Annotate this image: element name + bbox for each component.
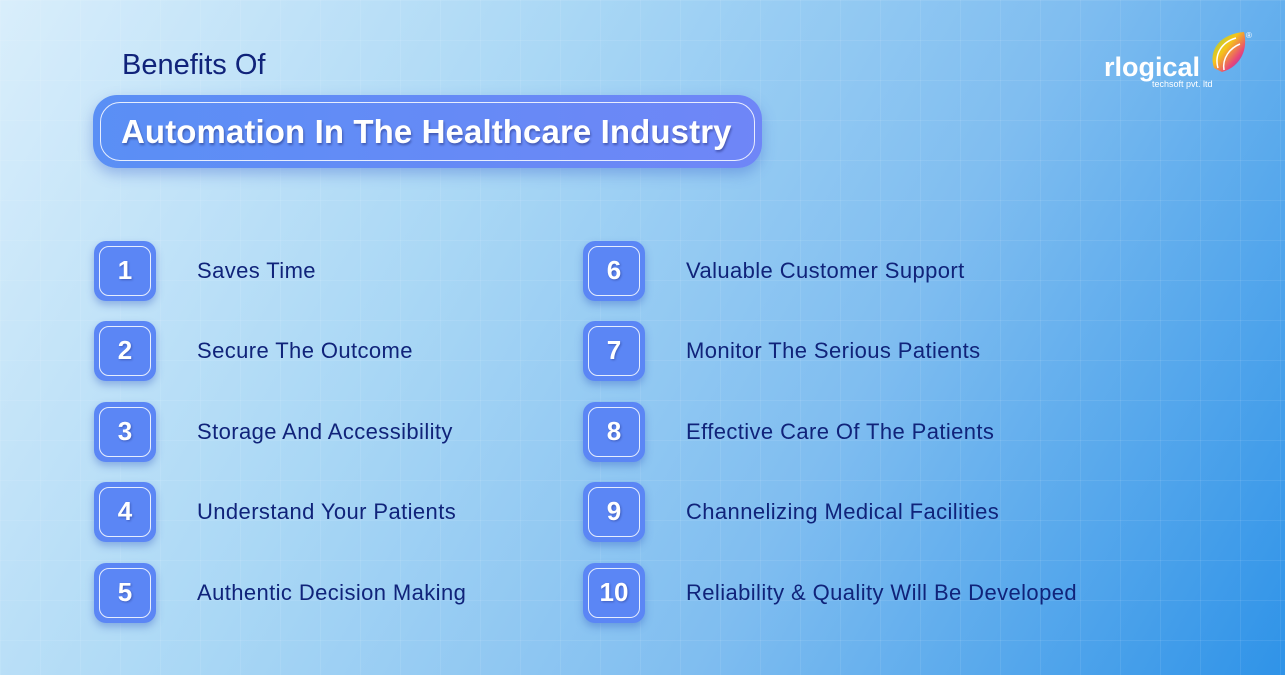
item 2 (90, 320, 413, 390)
item 9 (580, 482, 999, 550)
item 4 (90, 482, 456, 550)
logo (1104, 31, 1252, 89)
item 5: 5 (118, 577, 132, 607)
item 4: 4 (118, 496, 132, 526)
subtitle: Benefits Of (122, 49, 265, 81)
item 8 (580, 402, 994, 470)
title pill: Automation In The Healthcare Industry (121, 113, 732, 150)
item 9: 9 (607, 496, 621, 526)
item 8: 8 (607, 416, 621, 446)
item 8: Effective Care Of The Patients (686, 419, 994, 444)
item 3: Storage And Accessibility (197, 419, 453, 444)
item 7: 7 (607, 335, 621, 365)
logo: rlogical (1104, 52, 1200, 82)
item 7 (580, 321, 980, 388)
item 1: 1 (118, 255, 132, 285)
logo: techsoft pvt. ltd (1152, 79, 1213, 89)
item 7: Monitor The Serious Patients (686, 338, 980, 363)
title pill (93, 95, 762, 168)
item 10: Reliability & Quality Will Be Developed (686, 580, 1077, 605)
item 6 (580, 241, 965, 308)
item 1 (90, 240, 316, 310)
item 6: 6 (607, 255, 621, 285)
item 2: Secure The Outcome (197, 338, 413, 363)
item 10: 10 (600, 577, 628, 607)
item 5: Authentic Decision Making (197, 580, 466, 605)
item 3: 3 (118, 416, 132, 446)
item 1: Saves Time (197, 258, 316, 283)
item 5 (90, 563, 466, 631)
item 6: Valuable Customer Support (686, 258, 965, 283)
logo: ® (1246, 31, 1252, 40)
item 10 (580, 563, 1077, 630)
item 9: Channelizing Medical Facilities (686, 499, 999, 524)
item 3 (90, 402, 453, 470)
item 4: Understand Your Patients (197, 499, 456, 524)
item 2: 2 (118, 335, 132, 365)
